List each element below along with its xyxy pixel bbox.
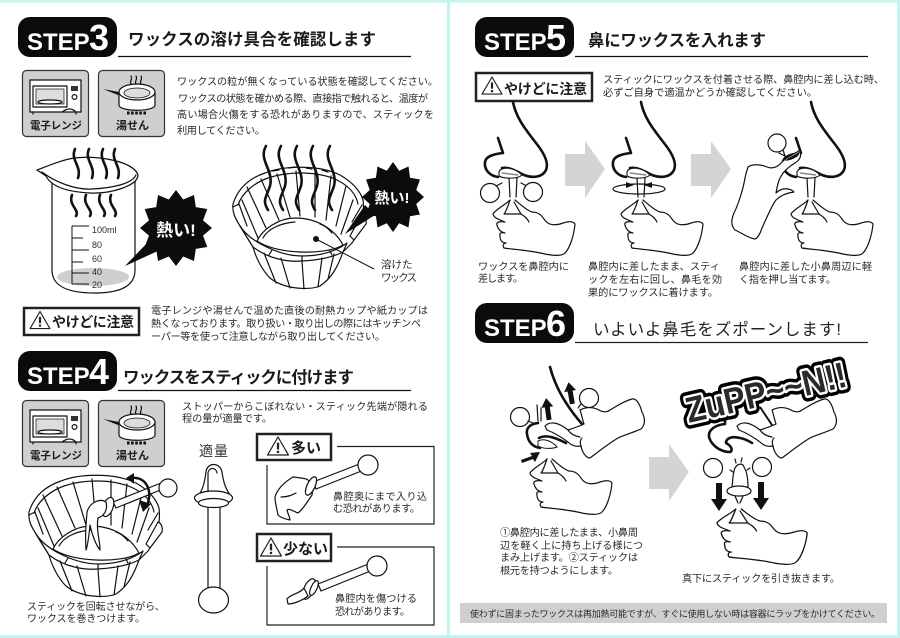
step 3 instructions: ワックスの状態を確かめる際、直接指で触れると、温度が: [178, 92, 428, 105]
caption right: 真下にスティックを引き抜きます。: [682, 572, 840, 585]
step 6 badge: [475, 303, 574, 344]
label: melted wax: 溶けた: [381, 259, 412, 271]
step 5 badge: 5: [546, 17, 566, 58]
panel: step 6: [460, 303, 887, 623]
caption left: [500, 526, 643, 577]
caption 1: 差します。: [478, 272, 523, 285]
too much label: 多い: [291, 439, 321, 457]
step 5 badge: STEP: [484, 29, 547, 56]
caption 2: [588, 260, 722, 299]
caption 2: 鼻腔内に差したまま、スティ: [588, 260, 720, 273]
caption 3: 鼻腔内に差した小鼻周辺に軽: [739, 260, 872, 273]
callout: hot, cup: [345, 162, 424, 234]
arrow: [565, 141, 605, 198]
caption 2: 果的にワックスに着けます。: [588, 286, 718, 299]
nose figure: press: [732, 102, 873, 255]
step 3 badge: [18, 17, 117, 58]
step 6 badge: STEP: [484, 315, 547, 342]
step 5 instructions: スティックにワックスを付着させる際、鼻腔内に差し込む時、: [603, 73, 884, 86]
caption left: 辺を軽く上に持ち上げる様につ: [500, 539, 643, 552]
icon: hot water bath: [98, 400, 164, 466]
caution text: 熱くなっております。取り扱い・取り出しの際にはキッチンペ: [151, 317, 421, 330]
beaker with steam: 80: [92, 240, 102, 250]
step 4 instructions: ストッパーからこぼれない・スティック先端が隠れる: [182, 400, 428, 413]
panel: too much: [257, 434, 434, 524]
icon: hot water bath: 湯せん: [116, 118, 149, 132]
caption 1: [478, 260, 569, 285]
too little label: 少ない: [283, 541, 328, 558]
step 3 instructions: 高い場合火傷をする恐れがありますので、スティックを: [177, 108, 434, 121]
caution text: 電子レンジや湯せんで温めた直後の耐熱カップや紙カップは: [151, 304, 428, 317]
icon: microwave: [22, 400, 88, 466]
too much note: [333, 490, 427, 515]
cup with stick and wax: [29, 473, 177, 597]
caution text: ーパー等を使って注意しながら取り出してください。: [151, 330, 385, 343]
arrow: [691, 141, 731, 198]
footer note: [460, 603, 887, 623]
too little note: [335, 592, 417, 618]
too little note: 恐れがあります。: [335, 605, 410, 618]
burn caution badge: [24, 308, 139, 335]
figure: pinch nose: [510, 367, 644, 514]
panel: step 4: [18, 351, 434, 625]
proper amount stick: [194, 443, 232, 613]
footer note: 使わずに固まったワックスは再加熱可能ですが、すぐに使用しない時は容器にラップをかけてください。: [470, 608, 880, 619]
icon: microwave: 電子レンジ: [30, 120, 82, 132]
callout: hot, beaker: [125, 190, 212, 266]
step 3 heading: ワックスの溶け具合を確認します: [128, 30, 376, 49]
step 6 badge: 6: [546, 303, 566, 344]
beaker with steam: 100ml: [92, 225, 117, 235]
sound effect: zuppon: ZuPP~~N!!: [681, 354, 850, 431]
caption 2: ックを左右に回し、鼻毛を効: [588, 273, 722, 286]
sound effect: zuppon: ZuPP~~N!!: [681, 354, 850, 431]
beaker with steam: [37, 149, 138, 293]
label: melted wax: [381, 259, 417, 284]
step 3 instructions: 利用してください。: [177, 125, 265, 137]
step 4 heading: ワックスをスティックに付けます: [123, 368, 354, 387]
step 4 cup caption: スティックを回転させながら、: [27, 600, 165, 613]
step 3 instructions: [177, 75, 438, 137]
step 5 heading: 鼻にワックスを入れます: [588, 30, 766, 50]
arrow: [649, 444, 689, 501]
step 4 badge: STEP: [27, 363, 90, 390]
panel: step 3: [18, 17, 438, 343]
icon: hot water bath: [98, 70, 164, 136]
panel: too little: [257, 534, 434, 625]
figure: pull out: [704, 399, 836, 564]
stick with too little wax: [287, 556, 387, 604]
paper cup with melted wax: [233, 146, 374, 289]
stick with too much wax: [275, 455, 378, 520]
step 3 instructions: ワックスの粒が無くなっている状態を確認してください。: [177, 75, 438, 88]
step 4 instructions: [182, 400, 428, 425]
step 4 instructions: 程の量が適量です。: [182, 412, 272, 425]
step 4 badge: 4: [89, 351, 109, 392]
too little label: [257, 534, 331, 561]
nose figure: rotate: [613, 102, 703, 255]
too little note: 鼻腔内を傷つける: [335, 592, 417, 605]
step 4 cup caption: [27, 600, 165, 625]
caption left: まみ上げます。②スティックは: [500, 552, 638, 564]
too much label: [257, 434, 331, 460]
step 5 instructions: 必ずご自身で適温かどうか確認してください。: [603, 86, 817, 99]
burn caution badge: やけどに注意: [52, 314, 134, 330]
beaker with steam: 60: [92, 254, 102, 264]
step 3 badge: STEP: [27, 29, 90, 56]
callout: hot, beaker: 熱い!: [156, 221, 196, 240]
beaker with steam: 20: [92, 280, 102, 290]
step 5 instructions: [603, 73, 884, 99]
sound effect: zuppon: ZuPP~~N!!: [681, 354, 850, 431]
caption 1: ワックスを鼻腔内に: [478, 260, 569, 273]
caption 3: [739, 260, 872, 286]
icon: hot water bath: 湯せん: [116, 448, 149, 462]
panel: step 5: [475, 17, 884, 299]
burn caution badge: やけどに注意: [504, 81, 587, 97]
caption left: ①鼻腔内に差したまま、小鼻周: [500, 526, 638, 539]
step 4 cup caption: ワックスを巻きつけます。: [27, 613, 145, 625]
burn caution badge: [476, 73, 592, 101]
step 6 heading: いよいよ鼻毛をズポーンします!: [593, 320, 841, 339]
caution text: [151, 304, 428, 343]
caption 3: く指を押し当てます。: [739, 273, 836, 286]
label: melted wax: ワックス: [381, 272, 417, 284]
step 3 badge: 3: [89, 17, 109, 58]
beaker with steam: 40: [92, 267, 102, 277]
step 4 badge: [18, 351, 117, 392]
nose figure: insert: [480, 102, 575, 255]
too much note: む恐れがあります。: [333, 502, 420, 515]
icon: microwave: [22, 70, 88, 136]
too much note: 鼻腔奥にまで入り込: [333, 490, 427, 503]
proper amount stick: 適量: [199, 443, 228, 459]
caption left: 根元を持つようにします。: [500, 564, 618, 577]
icon: microwave: 電子レンジ: [30, 450, 82, 462]
callout: hot, cup: 熱い!: [374, 189, 410, 207]
step 5 badge: [475, 17, 574, 58]
